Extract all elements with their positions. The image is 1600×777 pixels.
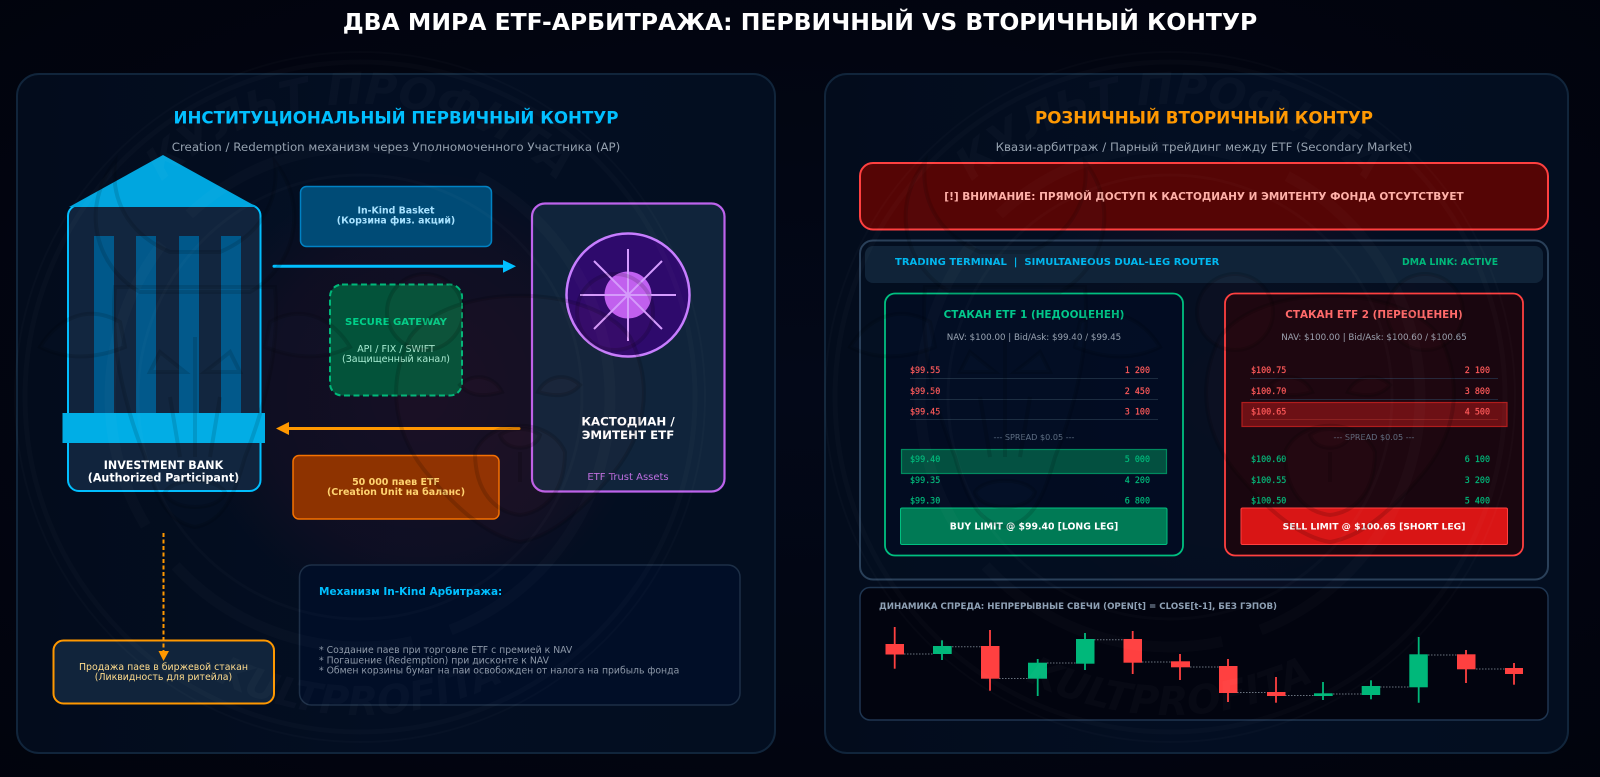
panel: institutional primary circuit <box>17 74 775 753</box>
box: in-kind arbitrage mechanism <box>300 565 740 705</box>
panel: custodian: ETF Trust Assets <box>587 472 669 483</box>
callout: warning banner <box>860 163 1548 230</box>
watermark: left logo: КУЛЬТ ПРОФИТА <box>136 63 584 190</box>
arrow: units to bank <box>276 422 519 435</box>
terminal header bar: TRADING TERMINAL | SIMULTANEOUS DUAL-LEG ROUTER <box>895 257 1220 268</box>
box: creation unit: 50 000 паев ETF <box>352 477 440 488</box>
box: sale to exchange order book <box>54 640 274 704</box>
chart: spread candlesticks <box>860 588 1548 720</box>
panel: retail secondary circuit <box>825 74 1568 753</box>
button: sell limit: SELL LIMIT @ $100.65 [SHORT LEG] <box>1283 522 1465 532</box>
arrow: basket to custodian <box>274 260 516 273</box>
order book: ETF 1: NAV: $100.00 | Bid/Ask: $99.40 / $99.45 <box>947 333 1121 343</box>
order book: ETF 2: 6 100 <box>1465 454 1490 464</box>
box: in-kind basket <box>300 186 492 246</box>
red candles <box>886 627 1523 703</box>
order book: ETF 2: --- SPREAD $0.05 --- <box>1334 432 1415 442</box>
order book: ETF 1: 3 100 <box>1125 406 1150 416</box>
watermark: right logo: KULTPROFITA <box>1021 648 1319 725</box>
order book: ETF 2: СТАКАН ETF 2 (ПЕРЕОЦЕНЕН) <box>1285 309 1463 321</box>
watermark: left logo <box>67 180 655 537</box>
watermark: right logo: КУЛЬТ ПРОФИТА <box>946 64 1394 190</box>
order book: ETF 2: $100.75 <box>1251 365 1286 375</box>
order book: ETF 1: $99.55 <box>910 365 940 375</box>
label: investment bank: (Authorized Participant) <box>88 472 239 485</box>
arrow: dashed to retail order book <box>158 533 169 661</box>
order book: ETF 2: 2 100 <box>1465 365 1490 375</box>
order book: ETF 1: 1 200 <box>1125 365 1150 375</box>
order book: ETF 2: 3 800 <box>1465 386 1490 396</box>
order book: ETF 1: СТАКАН ETF 1 (НЕДООЦЕНЕН) <box>944 309 1124 321</box>
box: in-kind arbitrage mechanism: * Погашение (Redemption) при дисконте к NAV <box>319 655 550 666</box>
box: secure gateway: (Защищенный канал) <box>342 354 450 365</box>
box: in-kind arbitrage mechanism: * Обмен корзины бумаг на паи освобожден от налога на прибыль фонда <box>319 666 679 677</box>
order book: ETF 2: $100.60 <box>1251 454 1286 464</box>
box: secure gateway <box>330 284 462 396</box>
order book: ETF 1: $99.30 <box>910 496 940 506</box>
order book: ETF 2: 3 200 <box>1465 475 1490 485</box>
button: buy limit <box>900 508 1167 544</box>
subheading: quasi-arbitrage: Квази-арбитраж / Парный трейдинг между ETF (Secondary Market) <box>996 140 1412 154</box>
panel: custodian: ЭМИТЕНТ ETF <box>582 428 674 442</box>
title: ДВА МИРА ETF-АРБИТРАЖА: ПЕРВИЧНЫЙ VS ВТОРИЧНЫЙ КОНТУР <box>343 8 1257 36</box>
box: in-kind basket: (Корзина физ. акций) <box>337 216 455 226</box>
order book: ETF 2: NAV: $100.00 | Bid/Ask: $100.60 / $100.65 <box>1281 333 1467 343</box>
order book: ETF 1: 4 200 <box>1125 475 1150 485</box>
heading: retail: РОЗНИЧНЫЙ ВТОРИЧНЫЙ КОНТУР <box>1035 108 1373 128</box>
order book: ETF 2: $100.50 <box>1251 496 1286 506</box>
order book: ETF 1: 6 800 <box>1125 496 1150 506</box>
box: secure gateway: API / FIX / SWIFT <box>357 344 435 355</box>
order book: ETF 1: $99.50 <box>910 386 940 396</box>
box: sale to exchange order book: Продажа паев в биржевой стакан <box>79 662 248 673</box>
terminal header bar <box>865 246 1543 283</box>
watermark: right logo <box>859 162 1462 544</box>
icon: investment bank building <box>62 155 265 491</box>
order book: ETF 2: 4 500 <box>1465 406 1490 416</box>
terminal header bar: DMA LINK: ACTIVE <box>1402 257 1498 268</box>
order book: ETF 2 <box>1225 294 1523 556</box>
button: sell limit <box>1241 508 1508 544</box>
order book: ETF 1: $99.45 <box>910 406 940 416</box>
button: buy limit: BUY LIMIT @ $99.40 [LONG LEG] <box>950 522 1118 532</box>
panel: custodian <box>532 204 724 492</box>
callout: warning banner: [!] ВНИМАНИЕ: ПРЯМОЙ ДОСТУП К КАСТОДИАНУ И ЭМИТЕНТУ ФОНДА ОТСУТСТВУЕТ <box>944 190 1465 203</box>
order book: ETF 1 <box>885 294 1183 556</box>
dotted connectors <box>904 640 1505 696</box>
green candles <box>933 633 1428 703</box>
order book: ETF 2: $100.55 <box>1251 475 1286 485</box>
box: in-kind arbitrage mechanism: Механизм In-Kind Арбитража: <box>319 586 502 598</box>
watermark: left logo: KULTPROFITA <box>211 648 509 725</box>
box: creation unit <box>293 456 499 519</box>
box: sale to exchange order book: (Ликвидность для ритейла) <box>95 672 232 683</box>
heading: institutional: ИНСТИТУЦИОНАЛЬНЫЙ ПЕРВИЧНЫЙ КОНТУР <box>174 108 618 128</box>
order book: ETF 2: 5 400 <box>1465 496 1490 506</box>
chart: spread candlesticks: ДИНАМИКА СПРЕДА: НЕПРЕРЫВНЫЕ СВЕЧИ (OPEN[t] = CLOSE[t-1], БЕЗ ГЭПОВ) <box>879 602 1277 612</box>
order book: ETF 2: $100.70 <box>1251 386 1286 396</box>
box: creation unit: (Creation Unit на баланс) <box>327 487 465 498</box>
icon: vault wheel <box>566 234 690 356</box>
order book: ETF 1: $99.40 <box>910 454 940 464</box>
box: secure gateway: SECURE GATEWAY <box>345 317 448 328</box>
order book: ETF 1: --- SPREAD $0.05 --- <box>994 432 1075 442</box>
box: in-kind basket: In-Kind Basket <box>357 206 435 216</box>
panel: custodian: КАСТОДИАН / <box>581 414 675 428</box>
order book: ETF 1: 5 000 <box>1125 454 1150 464</box>
panel: trading terminal <box>860 240 1548 580</box>
order book: ETF 1: 2 450 <box>1125 386 1150 396</box>
order book: ETF 2: $100.65 <box>1251 406 1286 416</box>
subheading: creation redemption: Creation / Redemption механизм через Уполномоченного Участника (AP) <box>172 140 620 154</box>
label: investment bank: INVESTMENT BANK <box>104 459 223 472</box>
order book: ETF 1: $99.35 <box>910 475 940 485</box>
box: in-kind arbitrage mechanism: * Создание паев при торговле ETF с премией к NAV <box>319 645 572 656</box>
